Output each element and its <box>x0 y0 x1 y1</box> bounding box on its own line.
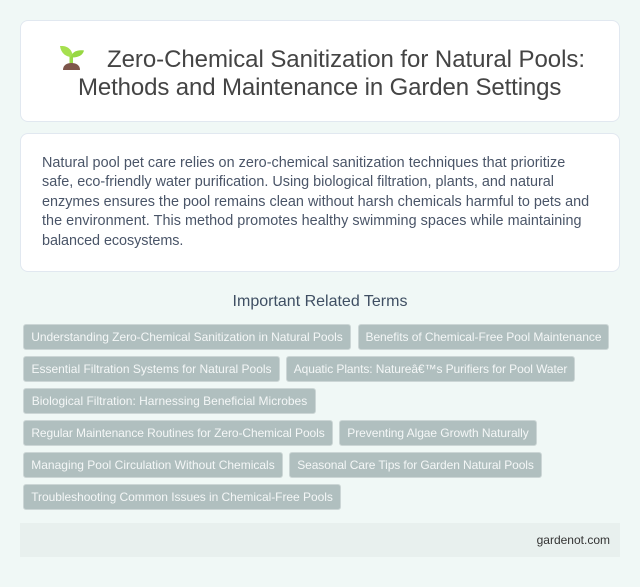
tag: Understanding Zero-Chemical Sanitization in Natural Pools <box>31 330 343 344</box>
tag: Regular Maintenance Routines for Zero-Chemical Pools <box>31 426 325 440</box>
tag <box>23 356 280 382</box>
tag <box>23 452 283 478</box>
heading: related terms: Important Related Terms <box>233 293 407 310</box>
tag: Aquatic Plants: Natureâ€™s Purifiers for Pool Water <box>294 362 567 376</box>
tag list <box>23 324 609 510</box>
paragraph text: Natural pool pet care relies on zero-chemical sanitization techniques that prioritize <box>42 155 565 171</box>
tag <box>23 388 316 414</box>
tag: Essential Filtration Systems for Natural Pools <box>31 362 272 376</box>
icon: seedling <box>60 46 84 70</box>
panel: title card <box>20 20 620 122</box>
tag: Managing Pool Circulation Without Chemicals <box>31 458 275 472</box>
paragraph text: enzymes ensures the pool remains clean without harsh chemicals harmful to pets and <box>42 194 589 210</box>
footer site name: gardenot.com <box>537 533 610 547</box>
panel: description card <box>20 133 620 272</box>
tag <box>286 356 575 382</box>
tag <box>23 484 341 510</box>
paragraph text: safe, eco-friendly water purification. Using biological filtration, plants, and natural <box>42 174 554 190</box>
title line 2: Methods and Maintenance in Garden Settings <box>78 74 561 101</box>
title line 1: Zero-Chemical Sanitization for Natural Pools: <box>107 46 585 73</box>
tag <box>339 420 537 446</box>
tag: Seasonal Care Tips for Garden Natural Pools <box>297 458 534 472</box>
tag <box>23 420 333 446</box>
tag: Troubleshooting Common Issues in Chemical-Free Pools <box>31 490 333 504</box>
tag: Preventing Algae Growth Naturally <box>347 426 529 440</box>
footer bar <box>20 523 620 557</box>
tag <box>23 324 351 350</box>
paragraph text <box>42 155 589 249</box>
tag <box>358 324 609 350</box>
tag <box>289 452 542 478</box>
paragraph text: balanced ecosystems. <box>42 233 183 249</box>
paragraph text: the environment. This method promotes healthy swimming spaces while maintaining <box>42 213 582 229</box>
tag: Benefits of Chemical-Free Pool Maintenance <box>365 330 602 344</box>
tag: Biological Filtration: Harnessing Beneficial Microbes <box>32 394 307 408</box>
